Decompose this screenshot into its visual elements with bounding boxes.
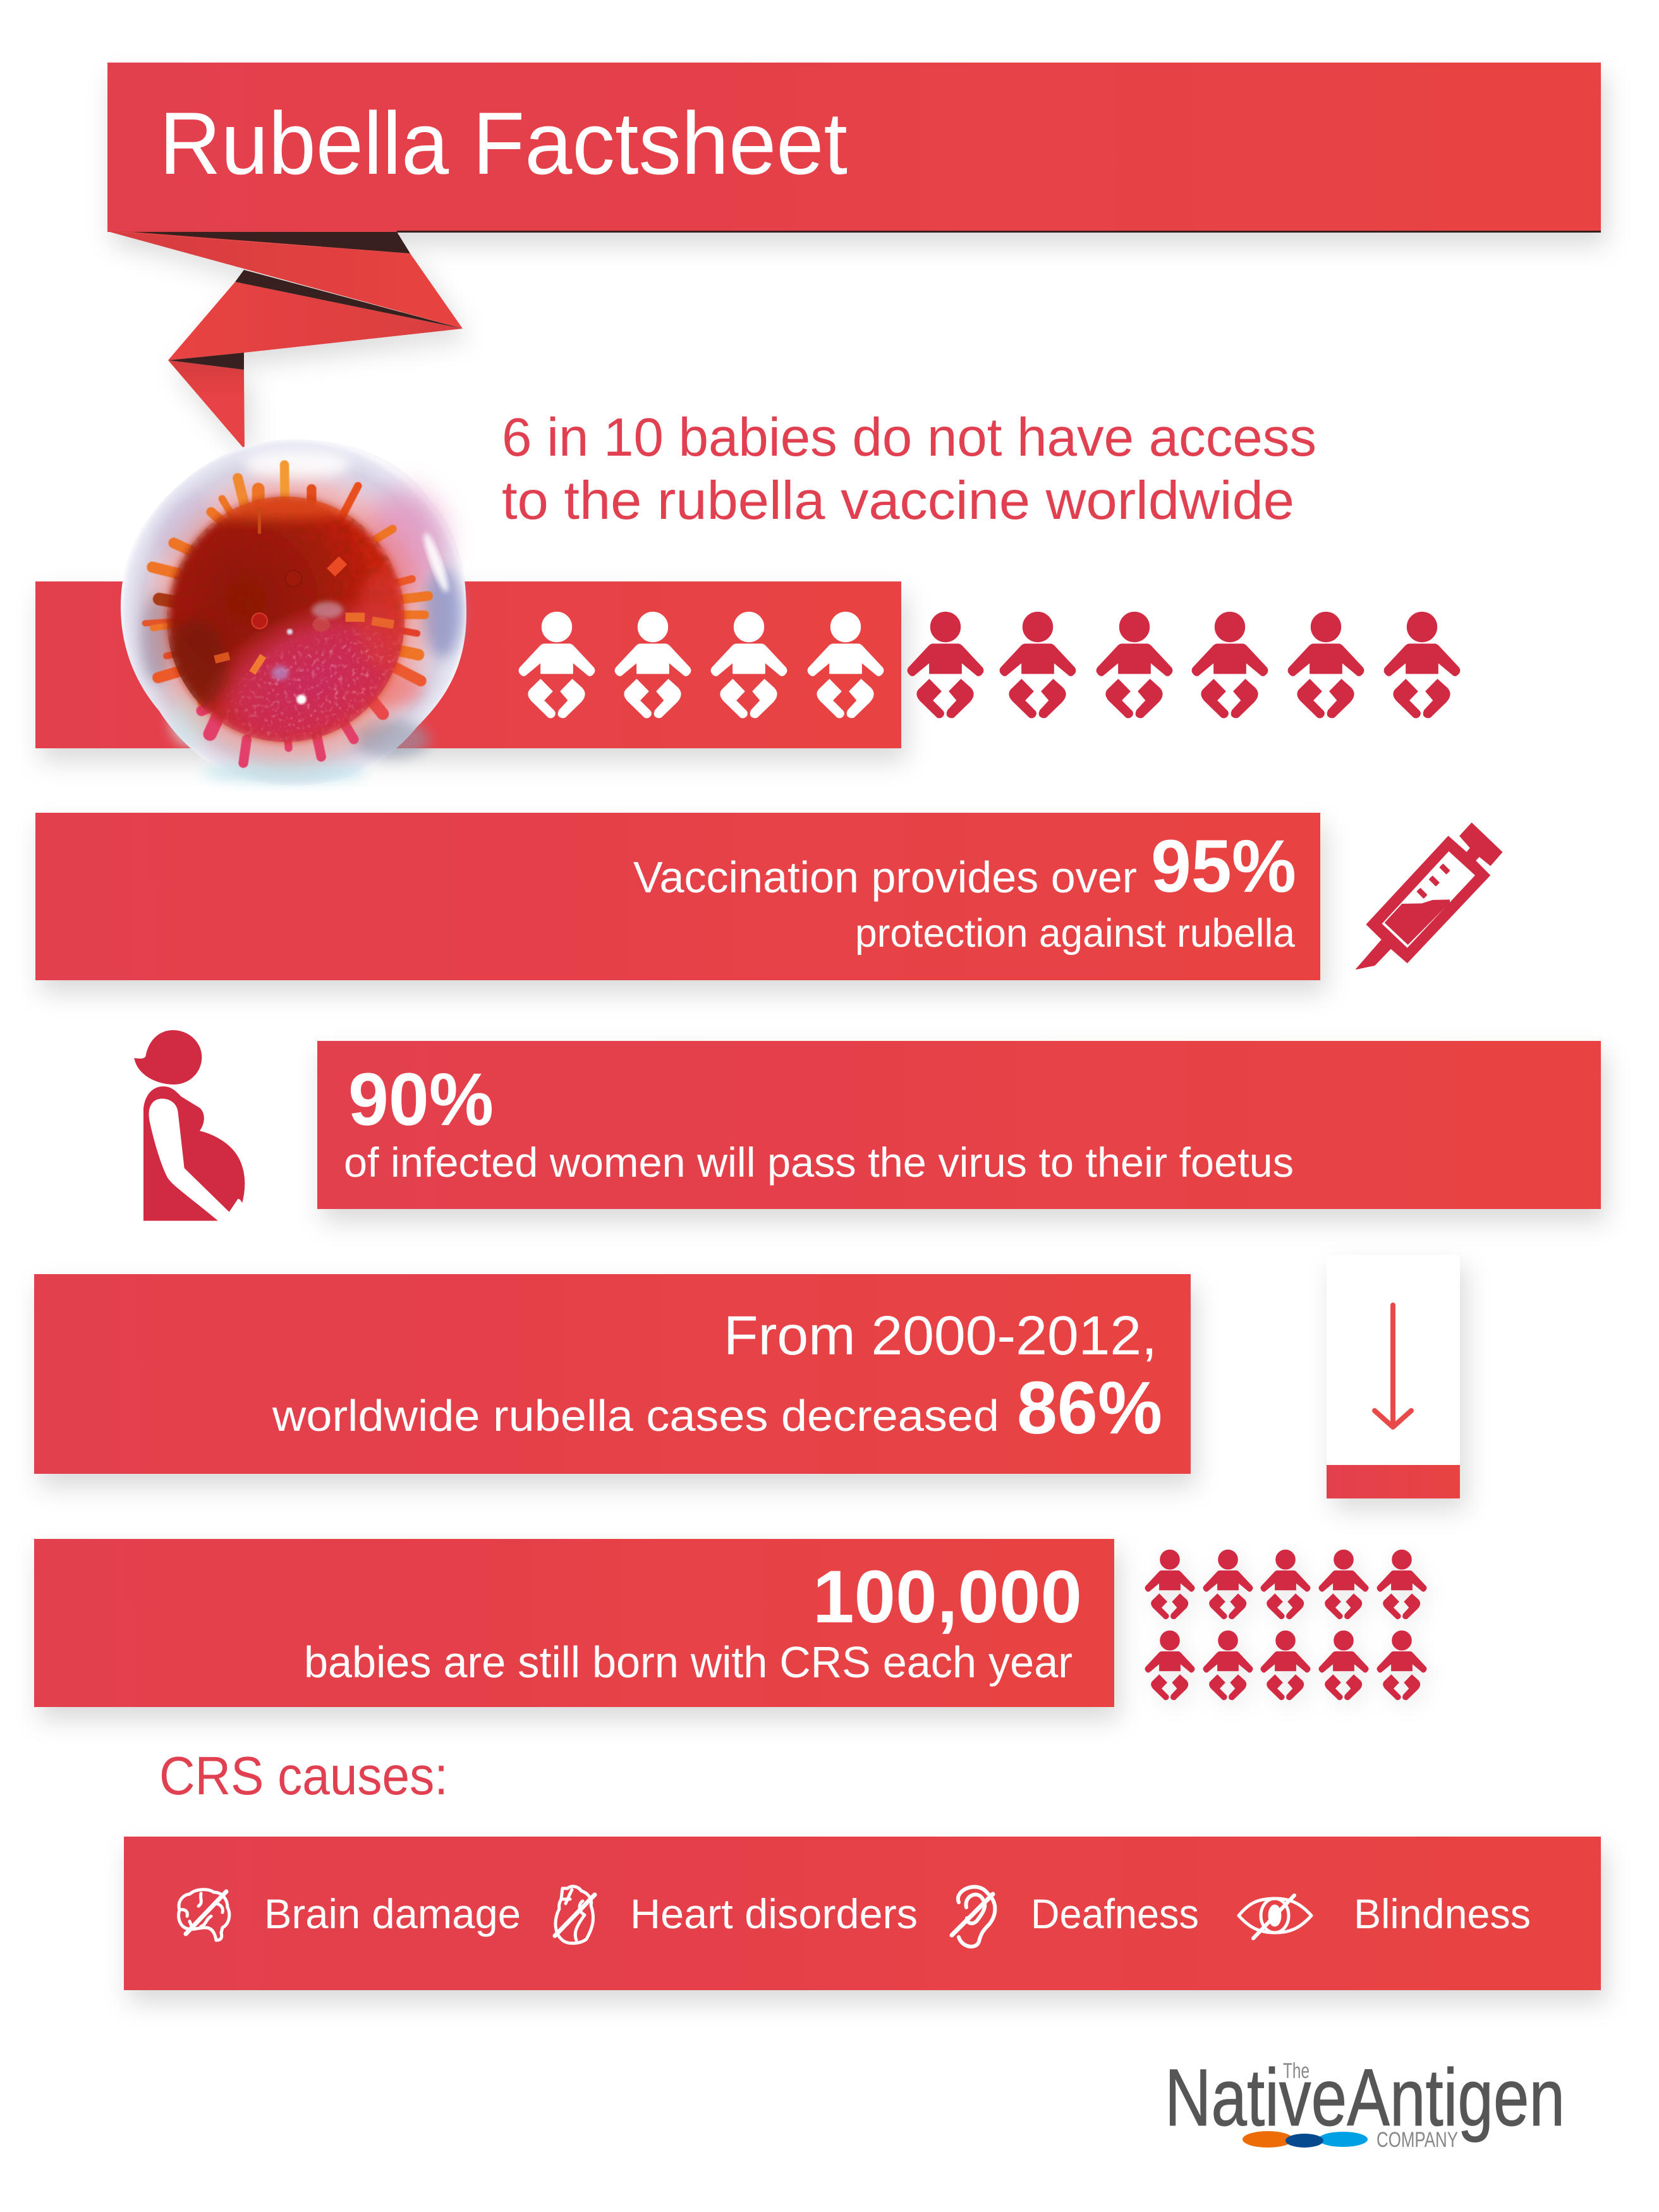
- label: deafness: Deafness: [1031, 1890, 1199, 1937]
- text: worldwide cases decreased: From 2000-2012,: [724, 1305, 1157, 1366]
- text: vaccination provides over 95%: protection against rubella: [855, 911, 1296, 956]
- text: 100,000 babies with CRS: babies are still born with CRS each year: [304, 1638, 1073, 1687]
- icon: syringe: [1356, 823, 1502, 969]
- title: Rubella Factsheet: [159, 94, 848, 193]
- text: vaccination provides over 95%: 95%: [1151, 825, 1296, 908]
- text: 100,000 babies with CRS: 100,000: [813, 1555, 1082, 1639]
- icon: brain: [179, 1890, 229, 1940]
- folded ribbon: [107, 231, 463, 449]
- text: 100,000 babies with CRS: [304, 1555, 1082, 1687]
- panel: CRS causes: [124, 1837, 1601, 1990]
- icon: ear: [952, 1887, 995, 1947]
- panel: 100,000 babies: [34, 1539, 1114, 1707]
- virus surface spikes and glints: [215, 509, 394, 704]
- headline: 6 in 10 babies: 6 in 10 babies do not have access: [502, 408, 1316, 468]
- virus in bubble: [121, 439, 466, 798]
- bubble: [121, 439, 466, 786]
- logo: The Native Antigen Company: The: [1283, 2059, 1310, 2083]
- panel: 86% decrease: [34, 1274, 1191, 1474]
- logo: The Native Antigen Company: COMPANY: [1376, 2128, 1458, 2152]
- icon: white babies: [520, 612, 884, 718]
- panel: 90%: [317, 1041, 1601, 1209]
- icon: pregnant woman: [134, 1030, 245, 1221]
- baby pictogram: ten babies: [1145, 1550, 1426, 1700]
- text: 90% of infected women: of infected women will pass the virus to their foetus: [344, 1139, 1294, 1186]
- virus glinting specks: [226, 626, 399, 742]
- bubble highlights: [142, 449, 461, 782]
- icon: eye: [1239, 1895, 1311, 1938]
- label: heart disorders: Heart disorders: [630, 1890, 918, 1937]
- panel: baby bar: [35, 581, 901, 748]
- title banner: [107, 63, 1601, 233]
- text: 90% of infected women: [344, 1058, 1294, 1186]
- virus core: [168, 498, 403, 741]
- virus spikes: [145, 465, 428, 763]
- icon: red babies: [908, 612, 1460, 718]
- baby pictogram: 4 white of 10: [520, 612, 1460, 718]
- text: vaccination provides over 95%: Vaccination provides over: [633, 853, 1137, 902]
- icon: down arrow: [1375, 1305, 1411, 1427]
- text: 90% of infected women: 90%: [348, 1058, 494, 1141]
- decrease arrow card: [1327, 1255, 1460, 1498]
- panel: vaccination: [35, 813, 1320, 980]
- label: blindness: Blindness: [1354, 1890, 1531, 1937]
- headline: 6 in 10 babies: [502, 408, 1316, 531]
- text: worldwide cases decreased: worldwide rubella cases decreased: [272, 1391, 999, 1440]
- text: vaccination provides over 95%: [633, 825, 1296, 956]
- icon: heart: [555, 1887, 595, 1943]
- label: brain damage: Brain damage: [264, 1890, 521, 1937]
- logo: The Native Antigen Company: NativeAntigen: [1165, 2053, 1565, 2143]
- text: worldwide cases decreased: [272, 1305, 1162, 1450]
- text: worldwide cases decreased: 86%: [1017, 1366, 1162, 1450]
- heading: CRS causes: CRS causes:: [159, 1746, 448, 1806]
- virus surface texture and lower pink region: [167, 497, 404, 742]
- headline: 6 in 10 babies: to the rubella vaccine worldwide: [502, 471, 1294, 531]
